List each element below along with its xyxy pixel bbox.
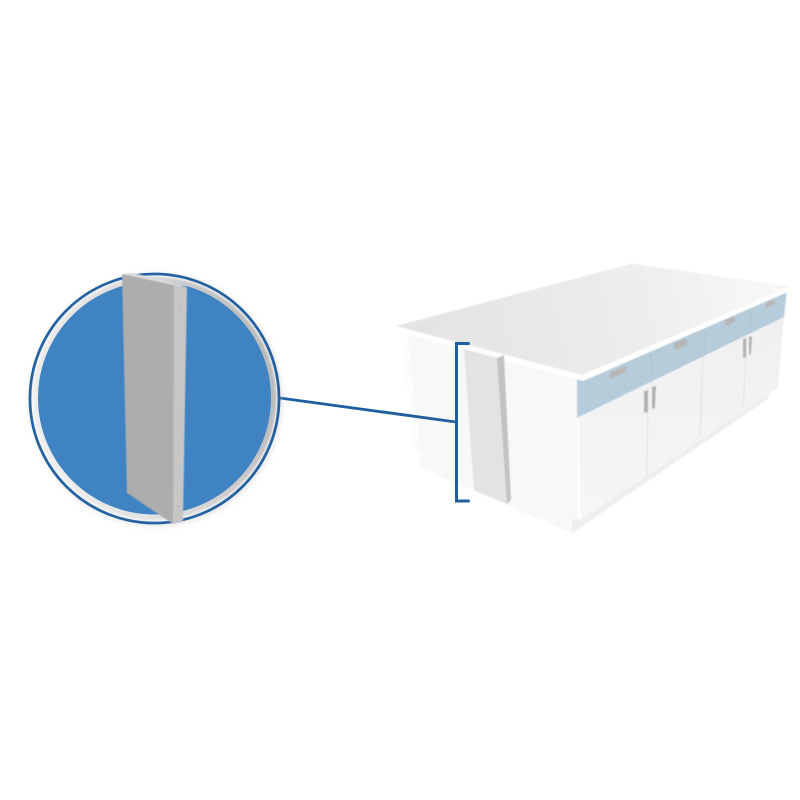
cabinet island (395, 263, 791, 533)
end face of cabinet (401, 333, 578, 533)
circle shadow (30, 274, 282, 526)
detail circle with magnified panel (30, 273, 282, 526)
bracket (456, 344, 468, 501)
toe kick (420, 392, 768, 533)
cabinet doors (578, 317, 784, 520)
countertop (395, 263, 791, 381)
circle outer ring (30, 274, 279, 523)
circle blue fill (38, 282, 271, 514)
magnified end panel (122, 273, 187, 524)
blue drawer strip (577, 290, 787, 418)
leader line (280, 398, 456, 422)
circle gray bevel (32, 276, 276, 520)
drawer handles (610, 299, 775, 379)
door handles (644, 336, 752, 413)
end panel on cabinet (464, 347, 511, 504)
